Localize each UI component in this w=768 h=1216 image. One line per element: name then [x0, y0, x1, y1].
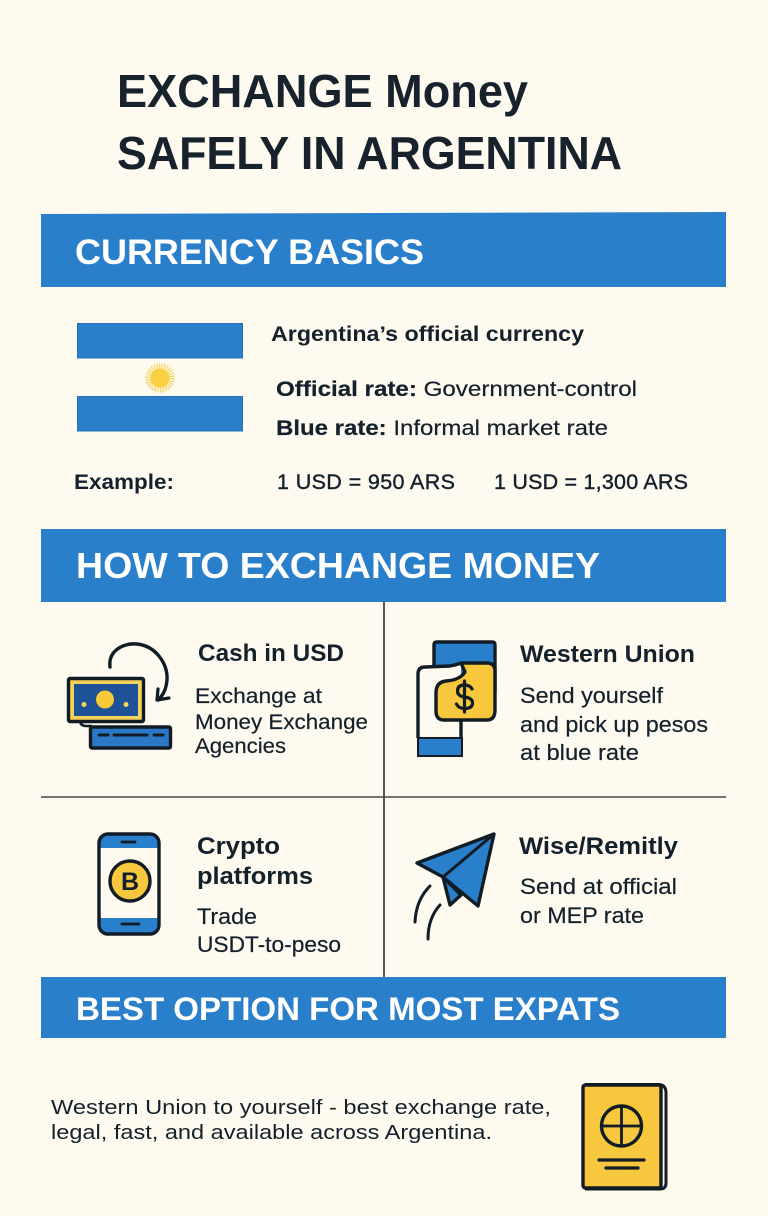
text: cash in USD: Cash in USD — [198, 640, 344, 667]
text: Wise/Remitly — [519, 833, 679, 928]
text: cash in USD: Money Exchange — [195, 711, 368, 734]
section banner: currency basics — [41, 212, 726, 287]
text: Western Union: Western Union — [520, 641, 695, 668]
text: Western Union: at blue rate — [520, 740, 639, 765]
text: crypto platforms: Crypto — [197, 833, 280, 860]
text: Wise/Remitly: Wise/Remitly — [519, 833, 679, 860]
text block: recommendation: Western Union to yourself - best exchange rate, — [51, 1097, 551, 1119]
text: Western Union: and pick up pesos — [520, 712, 708, 737]
text: Wise/Remitly: or MEP rate — [520, 903, 644, 928]
text block: currency description — [271, 322, 637, 440]
section banner: currency basics: CURRENCY BASICS — [75, 233, 424, 272]
text block: currency description: Official rate: Government-control — [276, 377, 637, 401]
exchange rate examples: 1 USD = 1,300 ARS — [494, 470, 688, 494]
exchange rate examples: Example: — [74, 471, 174, 494]
panel: Western Union — [418, 641, 708, 765]
text: cash in USD: Exchange at — [195, 685, 322, 708]
text: cash in USD: Agencies — [195, 735, 286, 758]
section banner: best option for most expats — [41, 977, 726, 1038]
text block: currency description: Argentina’s official currency — [271, 322, 584, 346]
icon: banknotes with arrow — [68, 644, 170, 748]
exchange rate examples — [74, 470, 688, 494]
text: crypto platforms: USDT-to-peso — [197, 932, 341, 957]
icon: passport — [583, 1084, 666, 1189]
title: SAFELY IN ARGENTINA — [117, 127, 622, 179]
text: crypto platforms: Trade — [197, 904, 257, 929]
text: Western Union — [520, 641, 708, 765]
icon: paper airplane — [415, 834, 494, 939]
icon: hand holding phone with dollar — [418, 642, 495, 756]
text block: recommendation — [51, 1097, 551, 1144]
title: EXCHANGE Money — [117, 65, 528, 117]
text block: currency description: Blue rate: Informal market rate — [276, 416, 608, 440]
icon: sun of May — [148, 366, 172, 390]
icon: Argentine flag — [78, 324, 242, 431]
text: cash in USD — [195, 640, 368, 758]
grid lines — [41, 602, 726, 977]
text: Wise/Remitly: Send at official — [520, 874, 677, 899]
panel: Wise/Remitly — [415, 833, 679, 939]
title — [117, 65, 622, 179]
text: Western Union: Send yourself — [520, 683, 664, 708]
section banner: how to exchange money: HOW TO EXCHANGE MONEY — [76, 545, 600, 586]
text: crypto platforms: platforms — [197, 863, 313, 890]
panel: crypto platforms — [99, 833, 341, 957]
section banner: how to exchange money — [41, 529, 726, 602]
section banner: best option for most expats: BEST OPTION FOR MOST EXPATS — [76, 991, 620, 1027]
text: crypto platforms — [197, 833, 341, 957]
panel: cash in USD — [68, 640, 368, 758]
icon: phone with coin — [99, 834, 159, 934]
icon: phone with coin: B — [121, 868, 139, 896]
text block: recommendation: legal, fast, and available across Argentina. — [51, 1122, 492, 1144]
exchange rate examples: 1 USD = 950 ARS — [277, 470, 455, 494]
